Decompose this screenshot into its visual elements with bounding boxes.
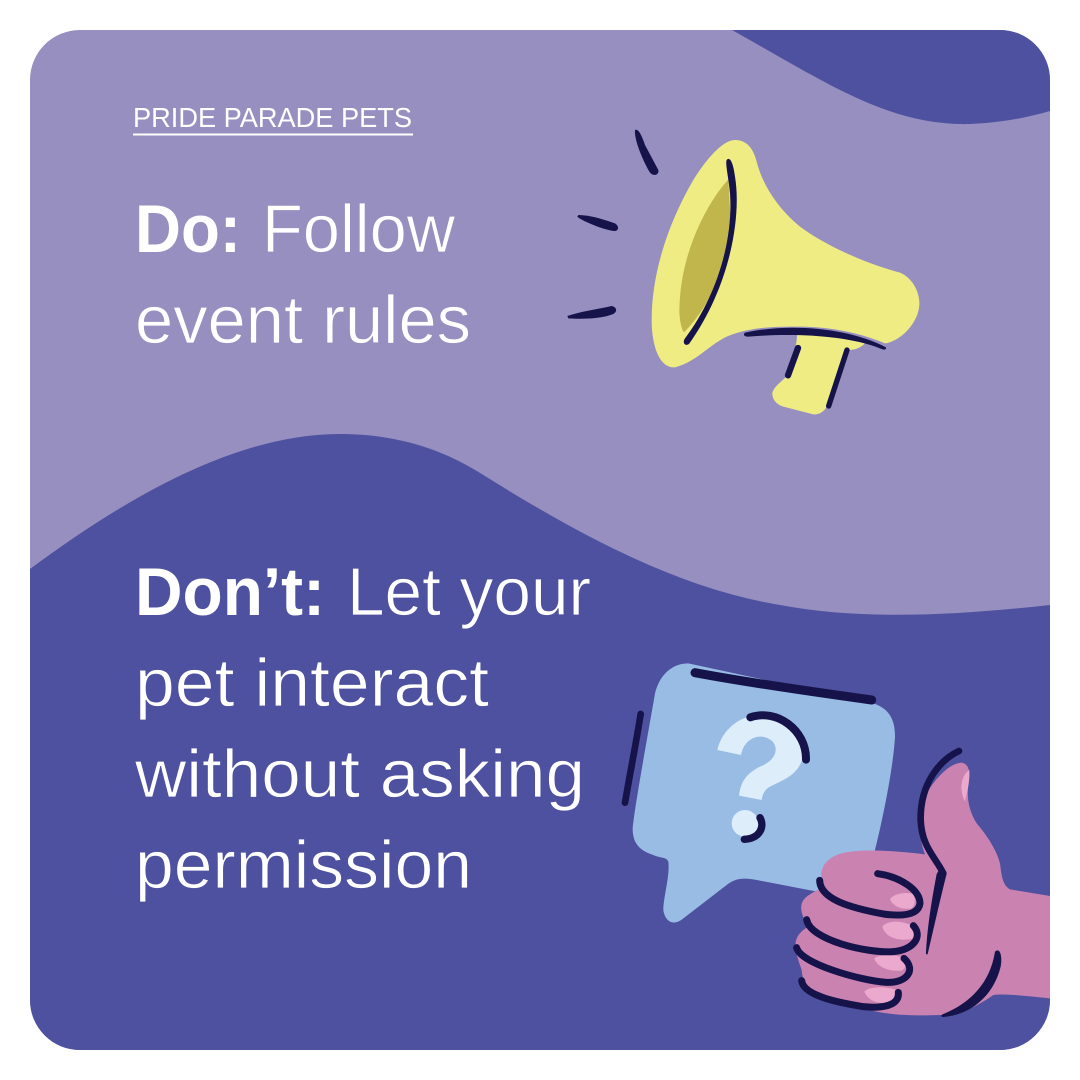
text block: do: Follow <box>262 191 456 267</box>
icon: thumbs up hand <box>796 751 1050 1017</box>
megaphone handle <box>772 330 867 414</box>
question mark <box>717 715 803 837</box>
icon: speech bubble with question mark <box>625 663 895 922</box>
icon: megaphone <box>567 130 919 414</box>
panel: lower dark wave <box>30 434 1050 1050</box>
wave: top right corner <box>732 30 1050 124</box>
text block: don't: without asking <box>134 736 585 812</box>
megaphone body <box>652 140 919 367</box>
handle strokes <box>788 348 847 406</box>
thumb crease <box>926 871 946 955</box>
megaphone inner cone <box>679 179 731 332</box>
text block: don't: Don’t: <box>135 554 325 630</box>
text block: do: event rules <box>135 282 471 358</box>
palm crease <box>941 950 1001 1017</box>
bubble ink strokes <box>625 673 872 839</box>
sound lines <box>567 130 658 319</box>
text block: don't: pet interact <box>135 645 489 721</box>
bubble body <box>633 663 895 922</box>
text block: do <box>135 191 471 358</box>
finger nails <box>864 770 969 1003</box>
hand shape <box>796 763 1050 1015</box>
megaphone ink strokes <box>684 159 737 345</box>
megaphone lower arc <box>744 328 886 350</box>
hand ink strokes <box>797 751 959 1007</box>
text block: don't: permission <box>135 827 472 903</box>
text block: don't <box>134 554 591 903</box>
eyebrow heading: PRIDE PARADE PETS <box>133 102 412 133</box>
text block: do: Do: <box>135 191 241 267</box>
text block: don't: Let your <box>347 554 591 630</box>
